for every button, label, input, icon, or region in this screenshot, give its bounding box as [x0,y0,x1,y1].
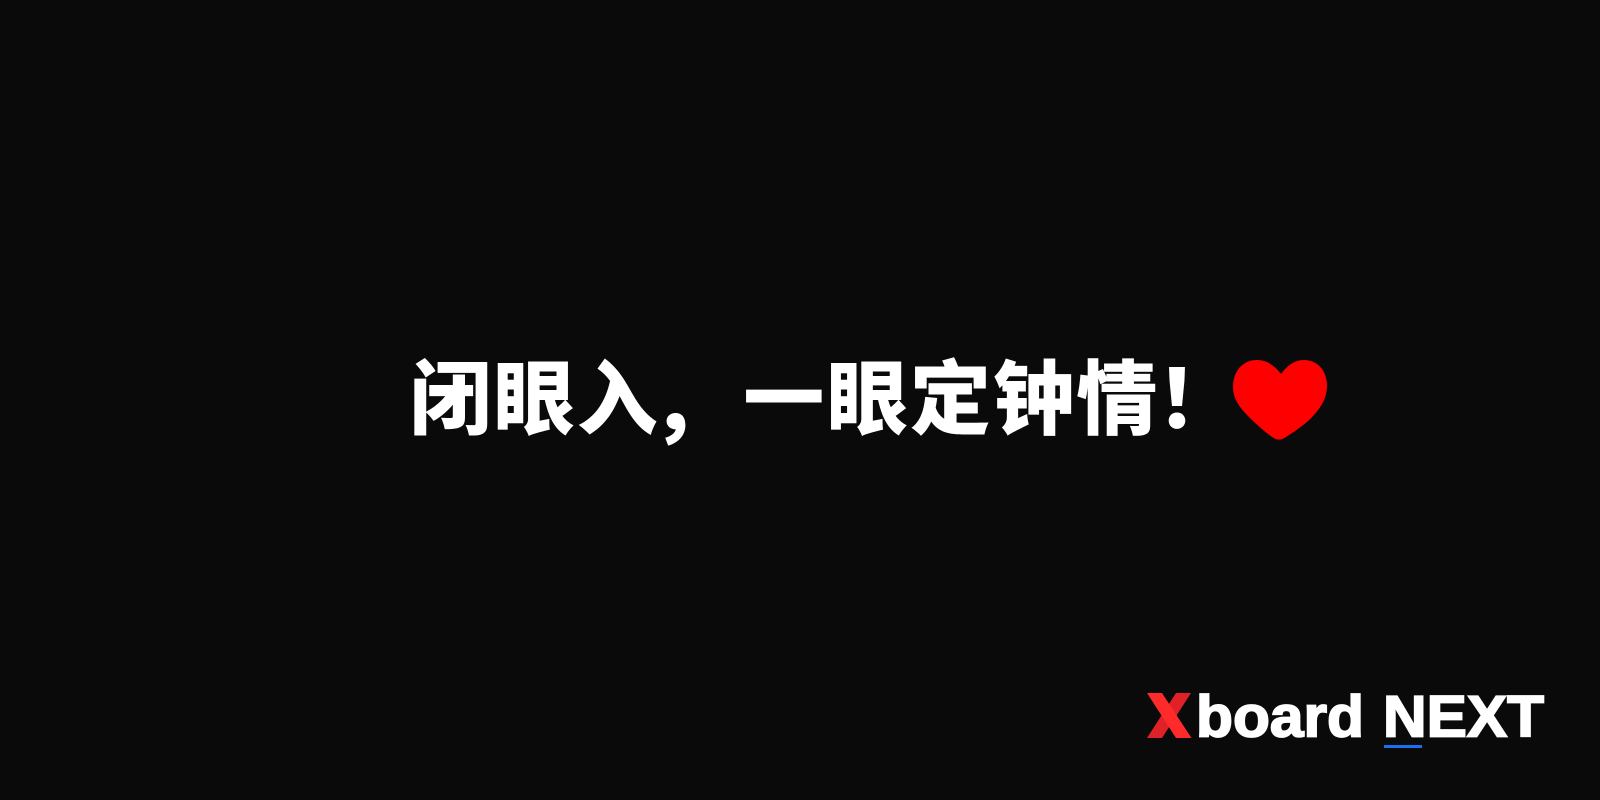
icon: red heart [1233,360,1327,440]
blue underline [1384,745,1422,748]
logo mark: red X [1147,693,1192,738]
logo: Xboard NEXT [1147,684,1544,750]
title: 闭眼入，一眼定钟情！ [410,335,1240,457]
logo word: NEXT: NEXT [1383,684,1544,750]
logo word: board: board [1196,684,1364,750]
